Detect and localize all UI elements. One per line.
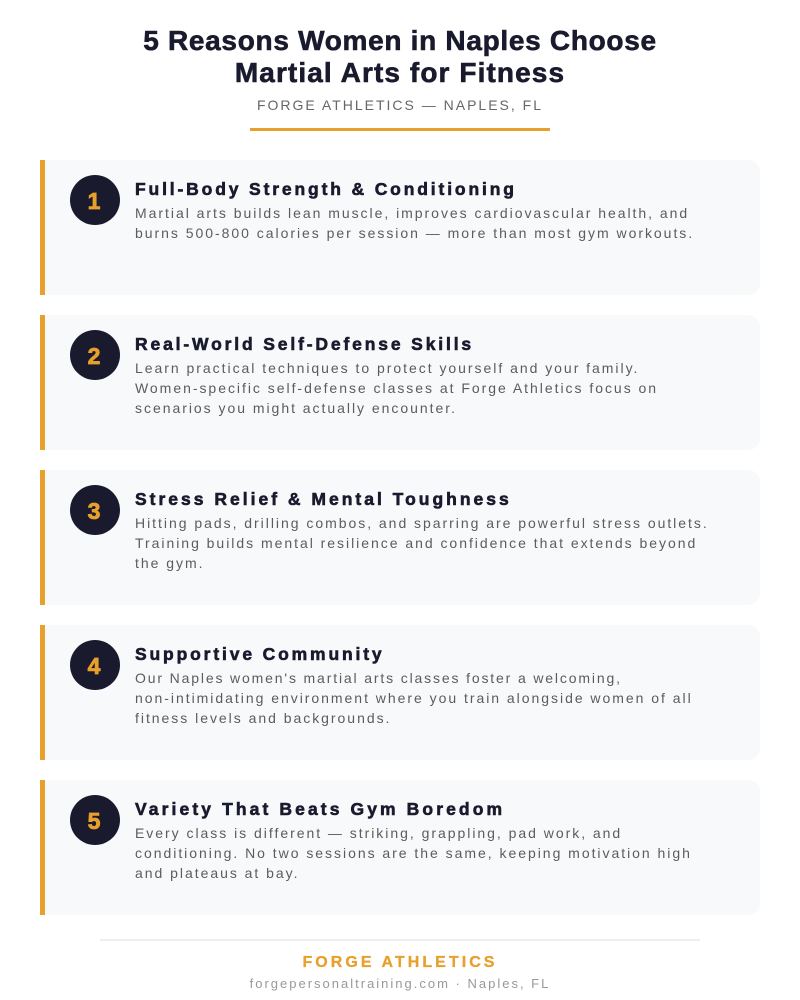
- subtitle: FORGE ATHLETICS — NAPLES, FL: [257, 97, 543, 113]
- description: reason 4: [135, 670, 693, 726]
- footer brand: FORGE ATHLETICS: [302, 954, 498, 971]
- text: reason 5: [134, 799, 692, 881]
- number 4: 4: [88, 653, 100, 679]
- panel: reason 3: [40, 470, 760, 605]
- description: reason 1: burns 500-800 calories per session — more than most gym workouts.: [135, 225, 694, 241]
- number circle 3: [70, 485, 120, 535]
- heading: reason 2: Real-World Self-Defense Skills: [135, 334, 474, 354]
- number 3: 3: [88, 498, 100, 524]
- text: reason 1: [135, 179, 694, 241]
- description: reason 3: [135, 515, 709, 571]
- title: Martial Arts for Fitness: [235, 57, 565, 88]
- panel: reason 1: [40, 160, 760, 295]
- number circle 2: [70, 330, 120, 380]
- heading: reason 4: Supportive Community: [135, 644, 385, 664]
- description: reason 5: conditioning. No two sessions are the same, keeping motivation high: [135, 845, 692, 861]
- text: reason 4: [135, 644, 693, 726]
- number circle 5: [70, 795, 120, 845]
- description: reason 2: Women-specific self-defense classes at Forge Athletics focus on: [135, 380, 658, 396]
- text: reason 3: [135, 489, 709, 571]
- heading: reason 1: Full-Body Strength & Conditioning: [135, 179, 517, 199]
- panel: reason 5: [40, 780, 760, 915]
- description: reason 2: Learn practical techniques to protect yourself and your family.: [135, 360, 639, 376]
- description: reason 4: non-intimidating environment where you train alongside women of all: [135, 690, 693, 706]
- description: reason 4: fitness levels and backgrounds.: [135, 710, 391, 726]
- number 2: 2: [88, 343, 100, 369]
- number 5: 5: [88, 808, 100, 834]
- accent rule: [250, 128, 550, 131]
- heading: reason 5: Variety That Beats Gym Boredom: [135, 799, 505, 819]
- number 1: 1: [88, 188, 100, 214]
- description: reason 2: [135, 360, 658, 416]
- description: reason 1: Martial arts builds lean muscle, improves cardiovascular health, and: [135, 205, 689, 221]
- number circle 4: [70, 640, 120, 690]
- description: reason 5: [135, 825, 692, 881]
- description: reason 5: Every class is different — striking, grappling, pad work, and: [135, 825, 622, 841]
- title: 5 Reasons Women in Naples Choose: [143, 25, 657, 56]
- description: reason 1: [135, 205, 694, 241]
- description: reason 3: Hitting pads, drilling combos, and sparring are powerful stress outlets.: [135, 515, 709, 531]
- text: reason 2: [135, 334, 658, 416]
- panel: reason 4: [40, 625, 760, 760]
- number circle 1: [70, 175, 120, 225]
- panel: reason 2: [40, 315, 760, 450]
- description: reason 3: the gym.: [135, 555, 204, 571]
- footer url: forgepersonaltraining.com · Naples, FL: [250, 976, 550, 991]
- description: reason 2: scenarios you might actually encounter.: [135, 400, 457, 416]
- description: reason 5: and plateaus at bay.: [135, 865, 299, 881]
- description: reason 3: Training builds mental resilience and confidence that extends beyond: [135, 535, 697, 551]
- heading: reason 3: Stress Relief & Mental Toughness: [135, 489, 512, 509]
- description: reason 4: Our Naples women's martial arts classes foster a welcoming,: [135, 670, 622, 686]
- title: [143, 25, 657, 88]
